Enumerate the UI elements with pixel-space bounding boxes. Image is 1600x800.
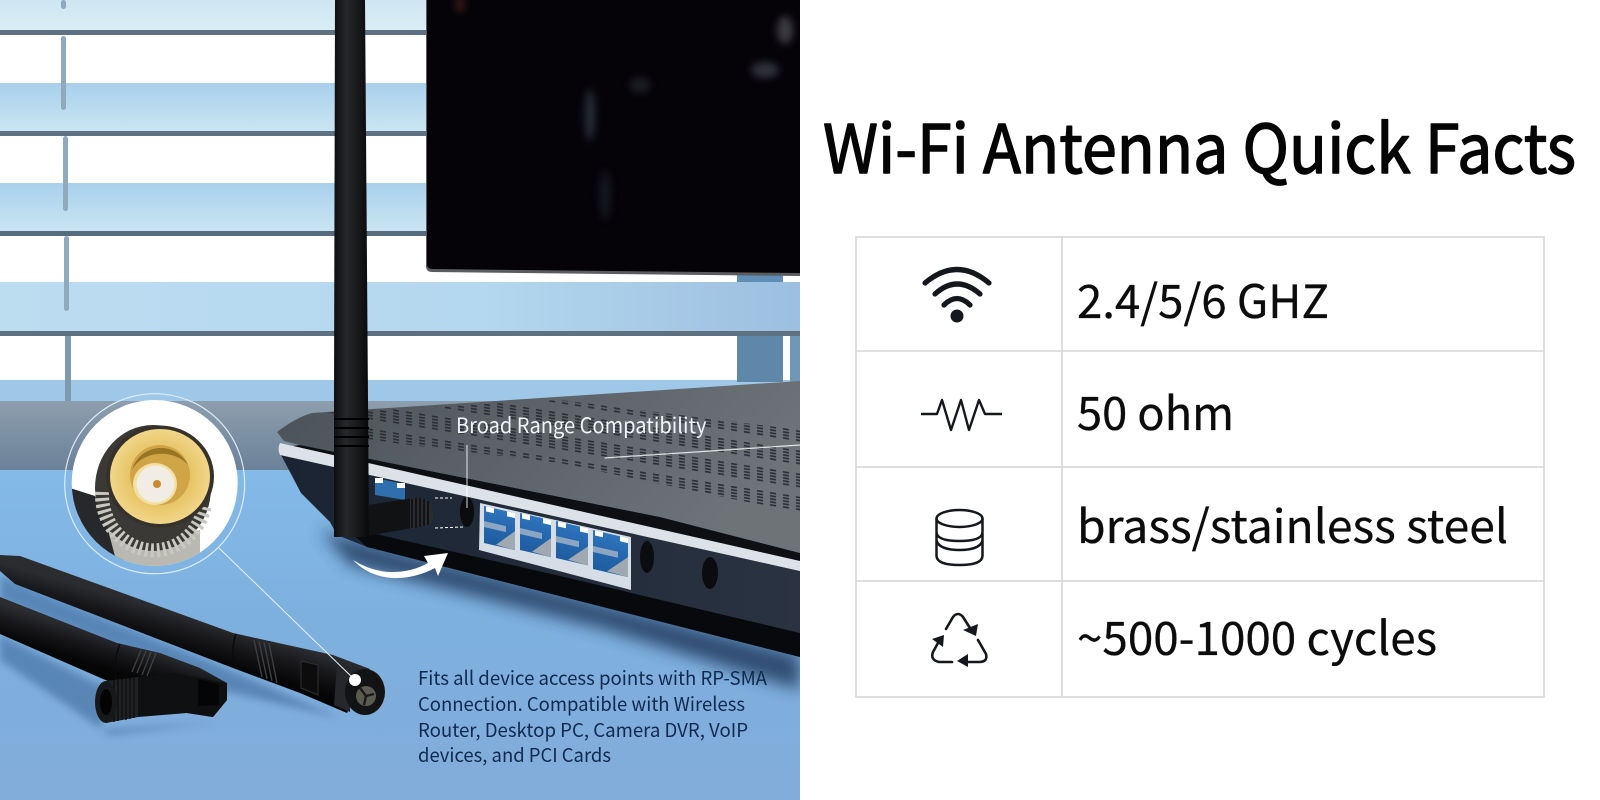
rotation arrow [353, 553, 448, 578]
row: material [936, 491, 1508, 565]
port 1 [484, 506, 515, 550]
callout lines: port [435, 445, 800, 528]
lying antenna: large [0, 555, 385, 715]
port 2 [520, 513, 551, 557]
router [277, 381, 800, 657]
label: broad range compatibility: Broad Range Compatibility [456, 410, 707, 440]
swivel connector [368, 497, 433, 536]
icon: wifi [925, 270, 989, 322]
row: lifespan: ~500-1000 cycles [1077, 603, 1437, 669]
quick facts table [856, 237, 1544, 697]
icon: resistor [921, 400, 1002, 430]
lying antenna: small with swivel joint [0, 597, 227, 723]
description text [418, 664, 767, 768]
monitor [426, 0, 800, 276]
row: frequency [925, 266, 1329, 332]
zoomed connector inset [65, 394, 245, 575]
row: impedance [921, 378, 1234, 444]
callout line and dot: connector [219, 548, 361, 686]
ethernet ports [479, 503, 631, 590]
row: impedance: 50 ohm [1077, 378, 1234, 444]
side sockets [460, 497, 718, 589]
description text: Connection. Compatible with Wireless [418, 690, 745, 717]
small port behind antenna [375, 478, 405, 500]
window blinds background [0, 0, 800, 402]
router body [280, 453, 800, 657]
icon: recycle [932, 614, 986, 667]
row: frequency: 2.4/5/6 GHZ [1077, 266, 1329, 332]
description text: Fits all device access points with RP-SMA [418, 664, 767, 691]
description text: Router, Desktop PC, Camera DVR, VoIP [418, 716, 748, 743]
desk surface [0, 401, 800, 800]
row: material: brass/stainless steel [1077, 491, 1508, 557]
router top surface [277, 381, 800, 562]
standing antenna [334, 0, 433, 537]
panel: product photo [0, 0, 800, 800]
description text: devices, and PCI Cards [418, 741, 611, 768]
router silver trim [278, 443, 800, 571]
port 3 [556, 521, 588, 565]
icon: stacked discs [936, 510, 982, 565]
port 4 [593, 530, 628, 577]
